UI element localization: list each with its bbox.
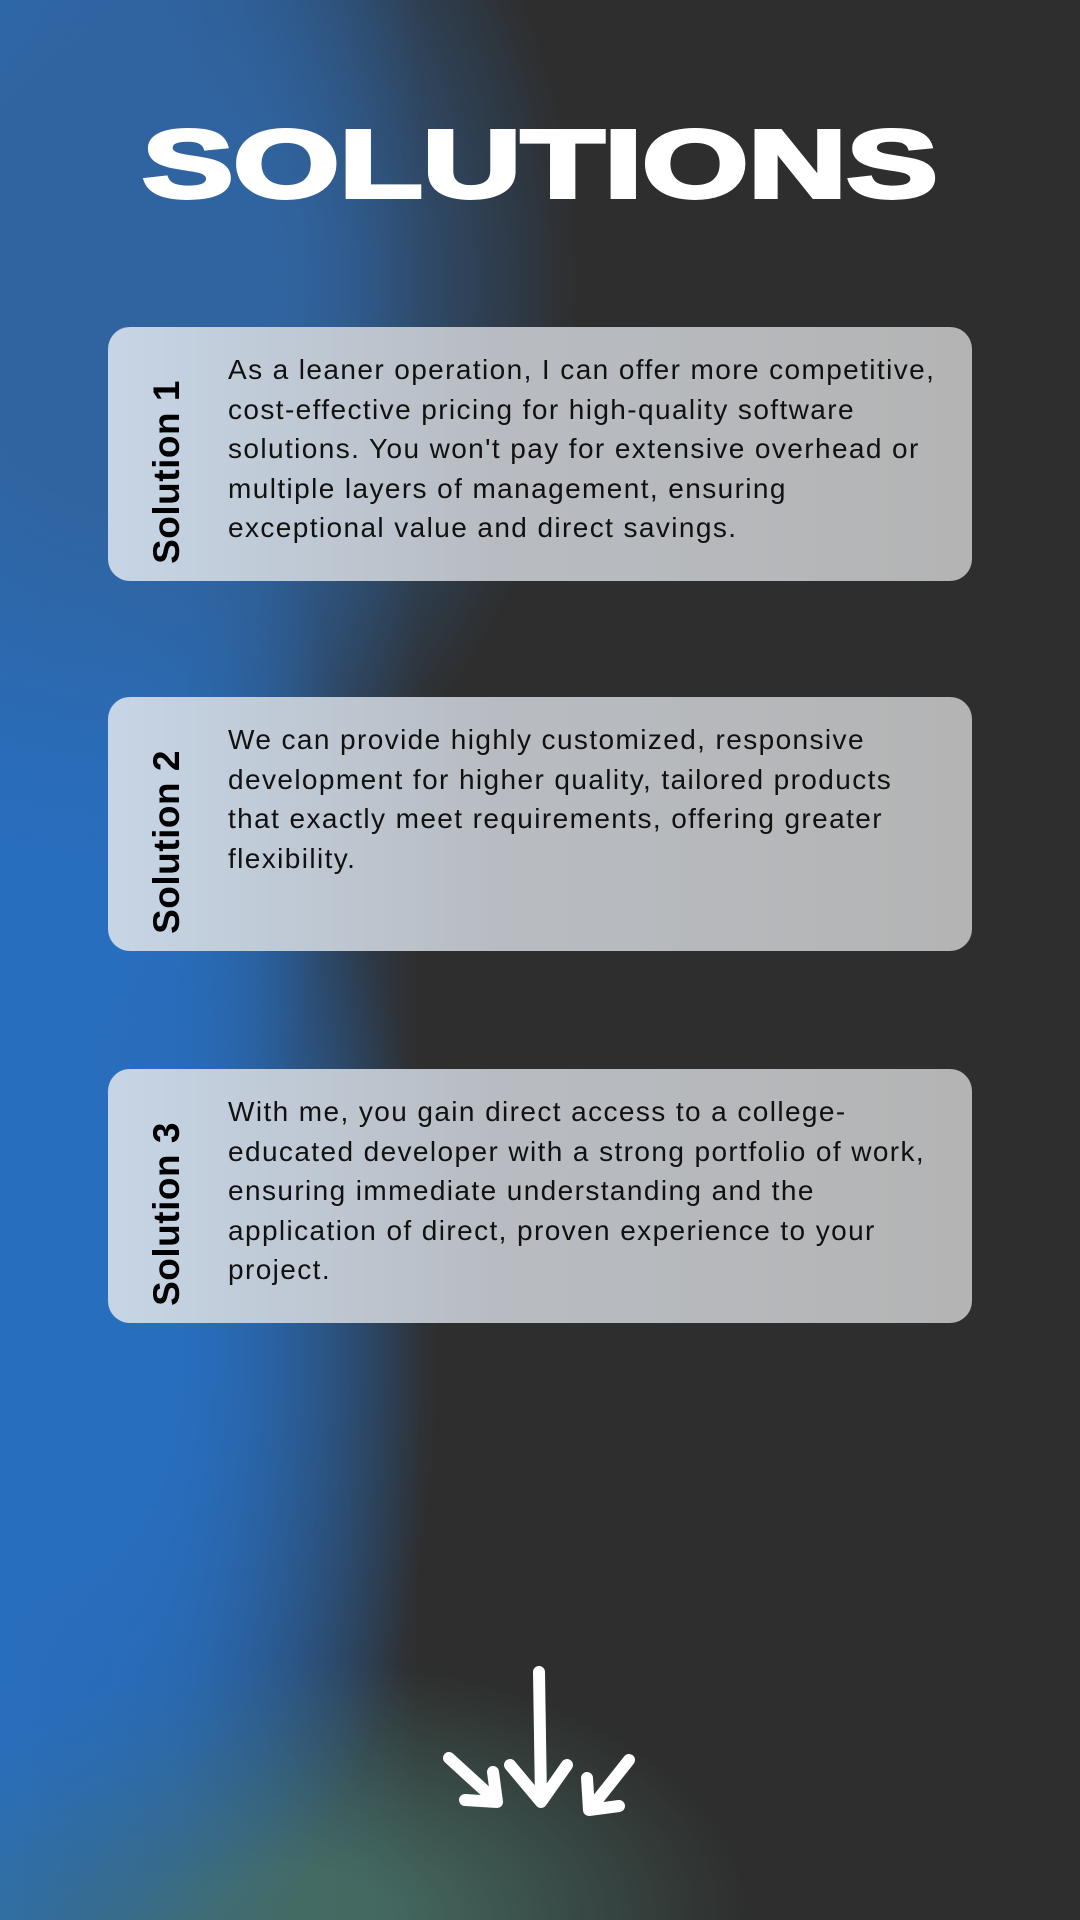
text: solution 3: ensuring immediate understanding and the	[228, 1175, 815, 1206]
text: solution 1: exceptional value and direct savings.	[228, 512, 737, 543]
text: solution 2: flexibility.	[228, 842, 356, 874]
text: solution 3: project.	[228, 1254, 331, 1285]
text: solution 2: development for higher quality, tailored products	[228, 764, 892, 794]
panel: solution 2	[108, 697, 972, 951]
text: solution 1: solutions. You won't pay for extensive overhead or	[228, 433, 920, 464]
text: solution 1: cost-effective pricing for high-quality software	[228, 394, 855, 424]
text: solution 1: multiple layers of management, ensuring	[228, 472, 787, 504]
panel: solution 3	[108, 1069, 972, 1323]
title: SOLUTIONS	[142, 111, 938, 218]
icon: arrows pointing down	[443, 1666, 635, 1816]
text: solution 2	[228, 724, 892, 874]
text: solution 1	[228, 354, 935, 543]
text: solution 3: application of direct, proven experience to your	[228, 1214, 876, 1246]
label: solution 3: Solution 3	[146, 1122, 187, 1306]
text: solution 3	[228, 1096, 925, 1285]
text: solution 3: educated developer with a strong portfolio of work,	[228, 1136, 925, 1166]
text: solution 2: that exactly meet requirements, offering greater	[228, 803, 883, 834]
label: solution 1: Solution 1	[146, 380, 187, 564]
panel: solution 1	[108, 327, 972, 581]
text: solution 2: We can provide highly customized, responsive	[228, 724, 865, 755]
text: solution 3: With me, you gain direct access to a college-	[228, 1096, 847, 1127]
label: solution 2: Solution 2	[146, 750, 187, 934]
text: solution 1: As a leaner operation, I can offer more competitive,	[228, 354, 935, 385]
